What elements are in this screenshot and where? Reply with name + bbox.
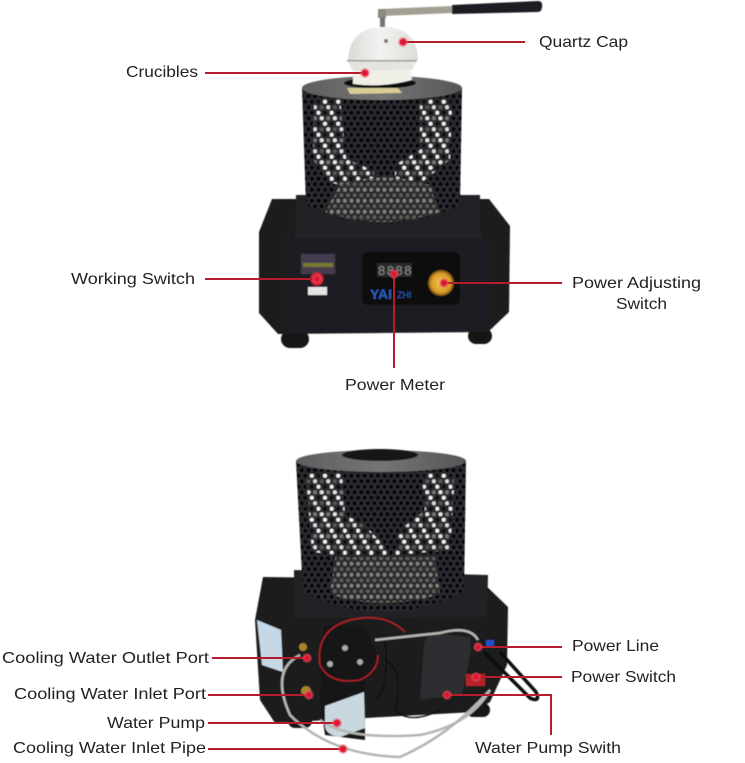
rear view of melting furnace bbox=[255, 449, 538, 757]
rear top plate bbox=[294, 570, 488, 618]
quartz cap bbox=[347, 27, 418, 71]
label: Power Adjusting Switch: Power Adjusting bbox=[572, 275, 701, 292]
callout dots bbox=[304, 38, 482, 752]
lid bbox=[302, 76, 462, 100]
label: Cooling Water Outlet Port: Cooling Water Outlet Port bbox=[2, 650, 210, 667]
panel: power meter and knob: YAI bbox=[370, 286, 392, 302]
callout lines bbox=[205, 42, 562, 749]
label: Quartz Cap: Quartz Cap bbox=[539, 34, 628, 51]
label: Working Switch: Working Switch bbox=[71, 271, 195, 288]
brass ports bbox=[299, 640, 494, 696]
water pump bbox=[318, 625, 376, 740]
base top plate bbox=[295, 195, 483, 238]
label: Cooling Water Inlet Pipe: Cooling Water Inlet Pipe bbox=[13, 740, 206, 757]
cylinder mesh bbox=[302, 88, 462, 224]
panel: power meter and knob: 8888 bbox=[378, 263, 413, 278]
rear lid opening bbox=[342, 449, 418, 461]
wires bbox=[319, 618, 538, 718]
label: Power Line: Power Line bbox=[572, 638, 659, 655]
clear water tubing bbox=[282, 630, 490, 757]
foot switch bbox=[420, 634, 471, 700]
furnace feet bbox=[281, 328, 492, 348]
rear lid bbox=[296, 450, 466, 472]
rear feet bbox=[288, 703, 490, 728]
panel: power meter and knob: ZHI bbox=[397, 290, 412, 300]
furnace base bbox=[259, 199, 510, 334]
label: Power Switch: Power Switch bbox=[571, 669, 676, 686]
label: Power Meter: Power Meter bbox=[345, 377, 446, 394]
yellow sticker bbox=[347, 88, 402, 94]
data label plate bbox=[257, 620, 283, 672]
base front face bbox=[284, 238, 490, 333]
front view of melting furnace bbox=[259, 1, 542, 348]
label: Cooling Water Inlet Port: Cooling Water Inlet Port bbox=[14, 686, 207, 703]
rear base bbox=[255, 577, 508, 723]
label: Crucibles: Crucibles bbox=[126, 64, 198, 81]
red power switch bbox=[466, 674, 485, 686]
handle bbox=[378, 1, 542, 27]
label: Water Pump Swith: Water Pump Swith bbox=[475, 740, 621, 757]
label: Water Pump: Water Pump bbox=[107, 715, 205, 732]
lid opening bbox=[344, 78, 416, 88]
label: Power Adjusting Switch: Switch bbox=[616, 296, 667, 313]
label: Power Adjusting Switch bbox=[572, 275, 701, 313]
panel: power meter and knob bbox=[362, 252, 460, 305]
panel: working switch bbox=[301, 254, 335, 295]
rear cylinder mesh bbox=[296, 461, 466, 612]
crucible bbox=[353, 68, 412, 85]
